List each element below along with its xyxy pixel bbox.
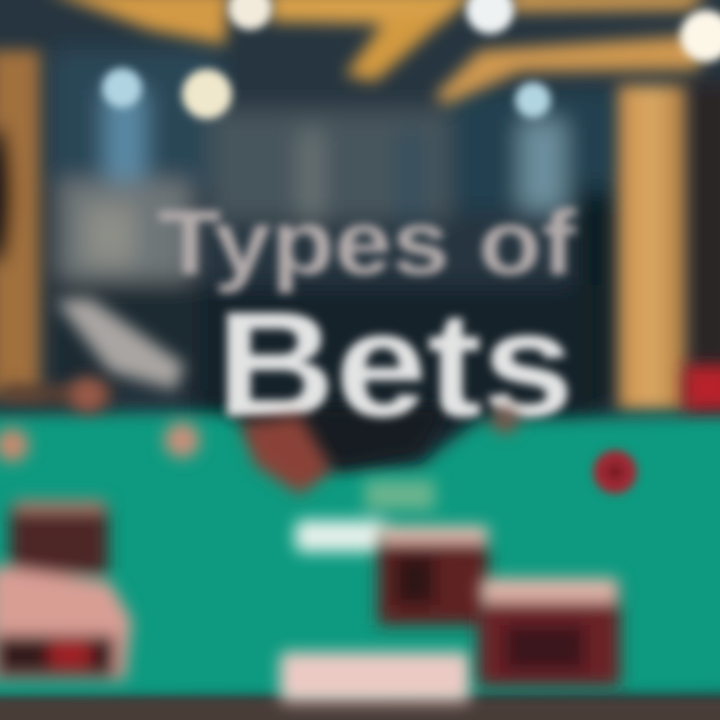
ceiling lights — [102, 0, 720, 119]
dice: right — [478, 578, 620, 686]
red chip — [593, 450, 637, 494]
table bottom edge — [0, 698, 720, 720]
heading line: Types of: Types of — [158, 192, 576, 294]
red accents on the rail — [0, 365, 720, 462]
dice: centre top — [240, 415, 332, 495]
dark rail behind the title — [0, 385, 450, 470]
background wall — [0, 0, 720, 440]
dice: centre — [378, 526, 488, 625]
wooden ceiling beams — [45, 0, 710, 105]
dice stack: left — [0, 500, 132, 680]
green table — [0, 412, 720, 700]
cards on table — [280, 480, 470, 702]
heading line: Bets: Bets — [216, 280, 574, 448]
wooden pillars — [0, 50, 686, 410]
title text: Types of Bets — [158, 192, 576, 448]
blurred white streak left of the title — [55, 298, 185, 390]
